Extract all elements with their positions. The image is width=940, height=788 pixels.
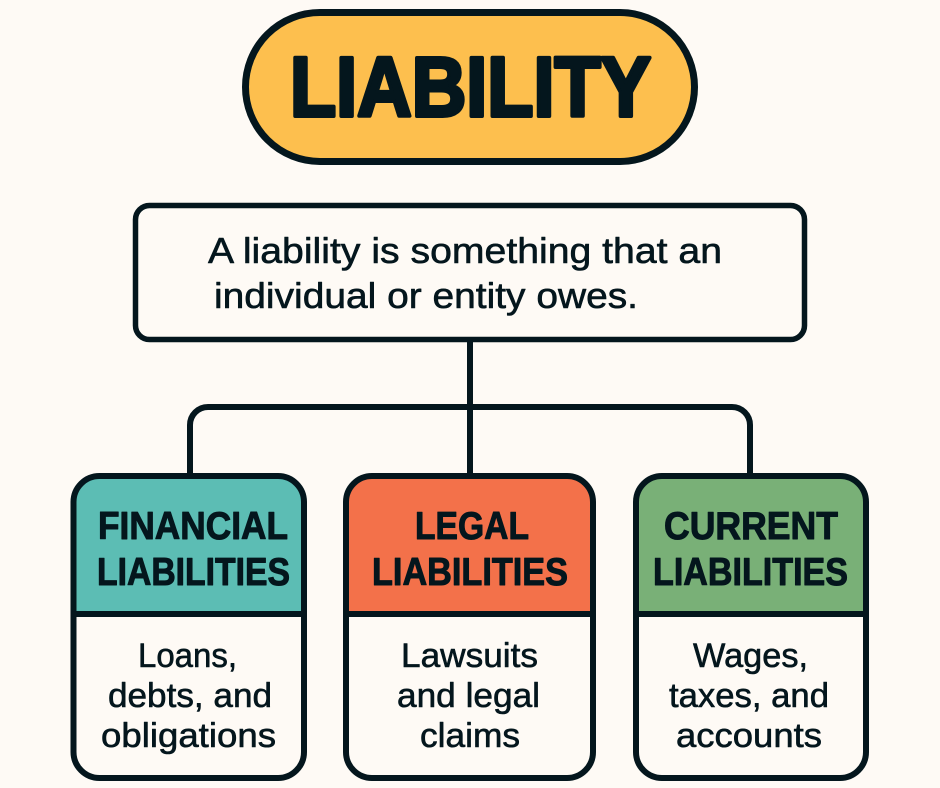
card: legal liabilities: LEGAL — [415, 505, 529, 548]
card: legal liabilities: and legal — [397, 677, 540, 715]
title pill — [246, 12, 694, 162]
card: legal liabilities: LIABILITIES — [372, 551, 568, 594]
card: current liabilities — [636, 476, 866, 778]
card: current liabilities: taxes, and — [669, 677, 829, 715]
definition box: individual or entity owes. — [214, 275, 638, 316]
definition box: A liability is something that an — [208, 230, 722, 271]
title pill: LIABILITY — [290, 40, 651, 134]
card: current liabilities: CURRENT — [664, 505, 838, 548]
card: financial liabilities — [74, 476, 304, 778]
card: financial liabilities: Loans, — [138, 637, 237, 675]
definition box — [136, 206, 804, 340]
card: legal liabilities: Lawsuits — [401, 637, 538, 675]
card: legal liabilities — [346, 476, 593, 778]
card: financial liabilities: FINANCIAL — [98, 505, 288, 548]
card: current liabilities: LIABILITIES — [653, 551, 848, 594]
connector lines — [190, 340, 750, 476]
card: financial liabilities: obligations — [101, 717, 276, 755]
card: current liabilities: Wages, — [693, 637, 808, 675]
card: legal liabilities: claims — [420, 717, 520, 755]
card: financial liabilities: debts, and — [108, 677, 272, 715]
card: financial liabilities: LIABILITIES — [97, 551, 290, 594]
card: current liabilities: accounts — [676, 717, 822, 755]
